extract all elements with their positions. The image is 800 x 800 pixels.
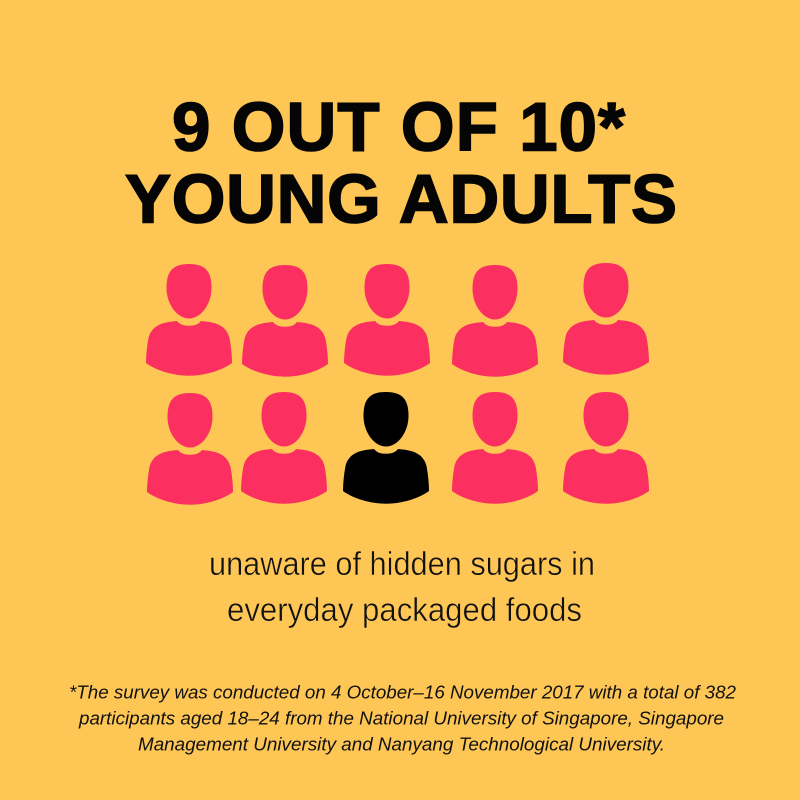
- subtitle: everyday packaged foods: [227, 591, 582, 628]
- subtitle: [209, 545, 595, 628]
- person 4: [452, 265, 538, 377]
- person 6: [147, 393, 233, 505]
- person 10: [563, 392, 649, 504]
- person 2: [242, 265, 328, 377]
- footnote: Management University and Nanyang Technological University.: [138, 734, 665, 754]
- title: [125, 88, 677, 238]
- person 5: [563, 263, 649, 375]
- title: YOUNG ADULTS: [125, 160, 677, 238]
- footnote: *The survey was conducted on 4 October–16 November 2017 with a total of 382: [69, 682, 736, 702]
- person 1: [146, 264, 232, 376]
- subtitle: unaware of hidden sugars in: [209, 545, 595, 582]
- person 8: black, the one aware: [343, 392, 429, 504]
- pictogram: 9 of 10 people highlighted: [146, 263, 649, 505]
- title: 9 OUT OF 10*: [172, 88, 625, 166]
- person 7: [241, 392, 327, 504]
- footnote: [69, 682, 736, 754]
- person 3: [344, 264, 430, 376]
- person 9: [452, 392, 538, 504]
- footnote: participants aged 18–24 from the National University of Singapore, Singapore: [78, 708, 724, 728]
